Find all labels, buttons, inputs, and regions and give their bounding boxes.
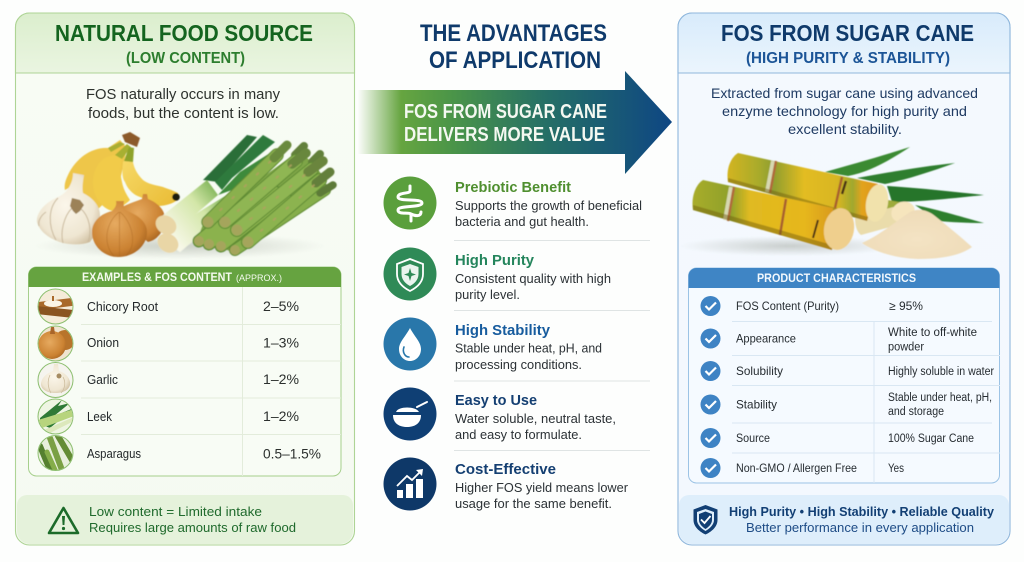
advantage: prebiotic benefit: Supports the growth of beneficial [455,199,642,213]
advantage: high purity [384,248,611,302]
panel: natural food source [16,13,354,545]
row: appearance: powder [888,342,924,354]
row: non-GMO and allergen free: Yes [888,463,904,475]
intro text: sugar cane: excellent stability. [788,121,902,137]
icon: shield [384,248,436,300]
asparagus spears [197,145,333,252]
row: FOS content: ≥ 95% [889,299,923,313]
subheading: low content: (LOW CONTENT) [126,50,245,67]
row: stability: and storage [888,406,944,418]
row: source: Source [736,431,770,445]
table heading: EXAMPLES & FOS CONTENT [82,270,233,284]
row: stability: Stability [736,398,777,412]
onion, front [92,201,147,257]
advantage: high stability: processing conditions. [455,358,582,372]
table heading: (APPROX.) [236,273,282,283]
bananas [65,132,180,212]
advantage: high purity: purity level. [455,288,520,302]
row: stability [700,392,992,418]
sugar cane leaves [825,147,984,223]
intro text: sugar cane: Extracted from sugar cane using advanced [711,85,978,101]
callout text: Requires large amounts of raw food [89,521,296,535]
heading: natural food source: NATURAL FOOD SOURCE [55,20,313,46]
row: leek [38,399,299,434]
row: solubility [700,361,994,381]
advantage: high stability [384,318,602,372]
row: chicory root [36,289,299,324]
table heading: PRODUCT CHARACTERISTICS [757,271,916,285]
sugar cane front stalk [692,180,857,252]
row: leek: Leek [87,410,113,424]
callout text [729,505,994,535]
advantage: prebiotic benefit: Prebiotic Benefit [455,180,571,196]
row: chicory root: Chicory Root [87,300,159,314]
callout: high purity, high stability, reliable quality [679,495,1009,544]
intro text: natural foods: FOS naturally occurs in many [86,87,281,103]
row: garlic: 1–2% [263,371,299,387]
advantage: prebiotic benefit [384,176,642,230]
icon: warning triangle [49,508,78,533]
table: examples and FOS content [28,267,341,476]
list: advantages [384,176,650,511]
heading: the advantages of application [420,20,607,74]
row: FOS content [700,296,923,316]
advantage: cost-effective: usage for the same benefit. [455,497,612,511]
row: onion [38,326,299,361]
row: asparagus: 0.5–1.5% [263,446,321,462]
row: onion: Onion [87,336,119,350]
advantage: easy to use: and easy to formulate. [455,428,582,442]
icon: shield check [694,505,718,534]
row: leek: 1–2% [263,408,299,424]
heading: FOS from sugar cane: FOS FROM SUGAR CANE [721,20,974,46]
leek, rear stalk [154,193,238,257]
table: product characteristics [688,268,1000,483]
row: appearance: White to off-white [888,327,977,339]
arrow: FOS from sugar cane delivers more value [357,71,672,174]
powder pile [862,210,972,259]
advantage: high purity: Consistent quality with high [455,272,611,286]
row: FOS content: FOS Content (Purity) [736,299,839,313]
row: appearance [700,327,977,354]
row: chicory root: 2–5% [263,298,299,314]
heading: the advantages of application: OF APPLICATION [429,47,601,74]
arrow: FOS from sugar cane delivers more value: FOS FROM SUGAR CANE [404,100,607,123]
icon: gut [384,176,436,230]
intro text: natural foods [86,87,281,122]
advantage: cost-effective [384,458,628,511]
intro text: natural foods: foods, but the content is low. [88,106,279,122]
advantage: cost-effective: Cost-Effective [455,462,556,478]
row: stability: Stable under heat, pH, [888,392,992,404]
row: onion: 1–3% [263,334,299,350]
advantage: high stability: Stable under heat, pH, and [455,342,602,356]
row: non-GMO and allergen free: Non-GMO / Allergen Free [736,461,857,475]
advantage: prebiotic benefit: bacteria and gut health. [455,215,589,229]
asparagus cut ends [194,216,254,255]
subheading: high purity and stability: (HIGH PURITY & STABILITY) [746,50,950,67]
onion, back [118,194,165,242]
row: asparagus [38,436,321,472]
row: garlic: Garlic [87,373,118,387]
icon: water drop [384,318,436,370]
icon: bowl and scoop [384,388,436,440]
intro text: sugar cane [711,85,978,137]
callout text [89,505,296,535]
callout: low content warning [17,495,353,544]
leek, leaves and front stalk [152,135,278,239]
sugar cane back stalk [727,153,891,224]
panel header: FOS from sugar cane [678,13,1010,73]
intro text: sugar cane: enzyme technology for high purity and [722,103,967,119]
garlic bulb [37,173,100,244]
panel: FOS from sugar cane [678,13,1010,545]
advantage: high purity: High Purity [455,253,534,269]
callout text: Better performance in every application [746,521,974,535]
icon: rising bar chart [384,458,436,510]
advantage: cost-effective: Higher FOS yield means lower [455,481,628,495]
callout text: High Purity • High Stability • Reliable Quality [729,505,994,519]
row: non-GMO and allergen free [700,458,904,478]
advantage: easy to use: Water soluble, neutral taste, [455,412,616,426]
row: solubility: Solubility [736,364,783,378]
illustration: sugar cane stalks and powder [680,147,984,259]
panel header: natural food source [16,13,354,73]
illustration: bananas, garlic, onions, leek and asparagus [35,132,333,259]
row: garlic [38,362,299,398]
advantage: easy to use: Easy to Use [455,393,537,409]
heading: the advantages of application: THE ADVANTAGES [420,20,607,47]
row: source [700,428,974,448]
row: solubility: Highly soluble in water [888,366,994,378]
arrow: FOS from sugar cane delivers more value: DELIVERS MORE VALUE [404,123,605,146]
row: source: 100% Sugar Cane [888,433,974,445]
sugar cane short piece [855,198,918,235]
row: asparagus: Asparagus [87,447,141,461]
advantage: easy to use [384,388,616,442]
advantage: high stability: High Stability [455,323,550,339]
row: appearance: Appearance [736,332,796,346]
callout text: Low content = Limited intake [89,505,262,519]
